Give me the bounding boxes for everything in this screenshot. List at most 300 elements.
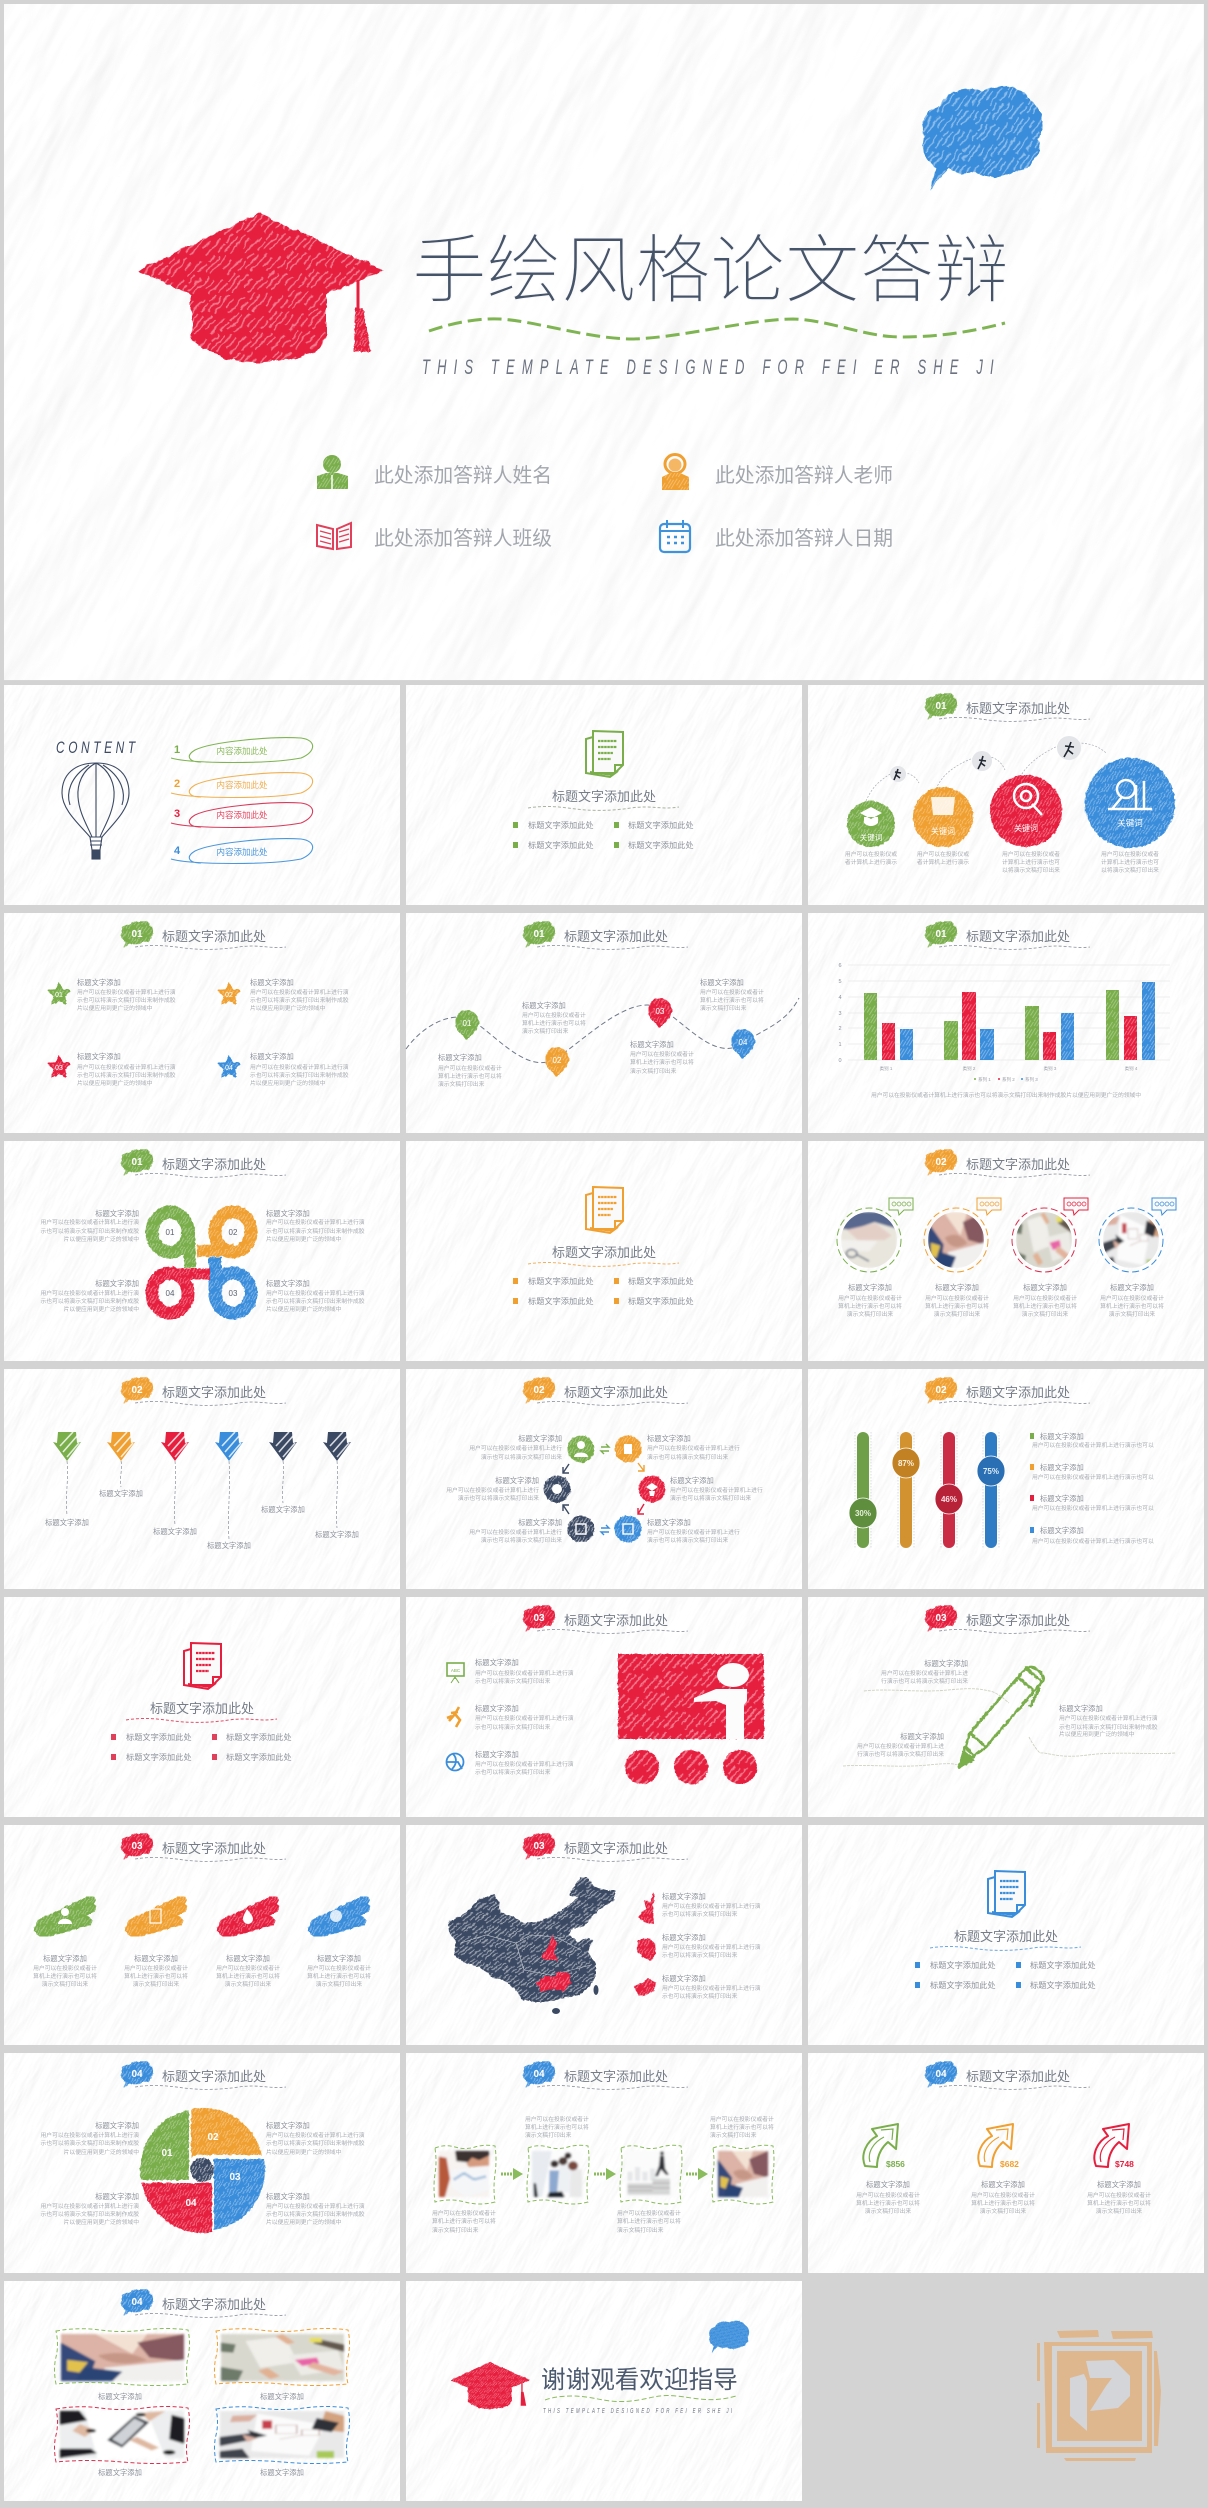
cycle nodes: [544, 1436, 666, 1542]
caption 2: 演示文稿打印出来: [525, 2131, 572, 2139]
text block 1: 行演示也可以将演示文稿打印出来: [881, 1677, 968, 1685]
text: navy left: 标题文字添加: [495, 1476, 539, 1485]
text: item 3: [475, 1750, 574, 1776]
captions: 者计算机上进行演示: [845, 858, 897, 866]
caption 3: 演示文稿打印出来: [1022, 1310, 1068, 1318]
text block 2: 示也可以将演示文稿打印出来制作成胶: [1059, 1723, 1158, 1731]
photo circle 3: [1012, 1198, 1088, 1272]
header: 01: [533, 929, 545, 940]
chart caption: 用户可以在投影仪或者计算机上进行演示也可以将演示文稿打印出来制作成胶片以便应用到更广泛的领域中: [871, 1091, 1141, 1099]
text: navy bottom: [469, 1518, 562, 1544]
circle: blue keyword: 关键词: [1117, 818, 1143, 828]
text: navy bottom: 标题文字添加: [518, 1518, 562, 1527]
legend item green: [1030, 1432, 1154, 1449]
captions: [845, 850, 1159, 874]
header: 标题文字添加此处: [162, 1841, 266, 1856]
header: [925, 2062, 1090, 2089]
header: [523, 1378, 688, 1405]
text: blue: 用户可以在投影仪或者计算机上进行: [647, 1528, 740, 1536]
header: [523, 2062, 688, 2089]
header: 04: [533, 2069, 545, 2080]
header: [925, 694, 1090, 721]
slide: section 01 green: [406, 685, 802, 905]
header: 标题文字添加此处: [564, 1613, 668, 1628]
text: green: 演示也可以将演示文稿打印出来: [481, 1453, 562, 1461]
province icon 2: [637, 1938, 656, 1961]
item 03: [48, 1052, 176, 1087]
pin 02: 02: [553, 1056, 562, 1065]
caption 3: 算机上进行演示也可以将: [617, 2217, 681, 2225]
arrow: green $856: $856: [886, 2159, 905, 2169]
connector arcs and runner badges: [866, 736, 1106, 801]
captions: 者计算机上进行演示: [917, 858, 969, 866]
item 02: 标题文字添加: [250, 978, 294, 987]
bar chart: 类别 2: [963, 1065, 976, 1072]
slide: presenter: [406, 1597, 802, 1817]
bullet list: 标题文字添加此处: [126, 1752, 192, 1762]
header: [925, 1150, 1090, 1177]
text block A: 标题文字添加: [438, 1053, 482, 1062]
text: top left: 示也可以将演示文稿打印出来制作成胶: [40, 1227, 139, 1235]
slide: photo process: [406, 2053, 802, 2273]
text block B: [522, 1001, 586, 1035]
caption 1: [33, 1954, 97, 1988]
legend item orange: 用户可以在投影仪或者计算机上进行演示也可以: [1032, 1473, 1154, 1481]
icon: documents: [586, 731, 623, 777]
text: bottom right: 用户可以在投影仪或者计算机上进行演: [266, 2202, 365, 2210]
list item 1: 1: [174, 744, 180, 756]
text: blue: 标题文字添加: [647, 1518, 691, 1527]
caption 2: 用户可以在投影仪或者计: [525, 2115, 589, 2123]
header: 标题文字添加此处: [966, 701, 1070, 716]
photo 4: 标题文字添加: [260, 2468, 304, 2477]
photo 1: [54, 2328, 190, 2401]
caption 4: 演示文稿打印出来: [1109, 1310, 1155, 1318]
text block 2: 用户可以在投影仪或者计算机上进行演: [1059, 1714, 1158, 1722]
list item 4: 4: [174, 845, 181, 857]
icon: documents: [184, 1643, 221, 1689]
header: 标题文字添加此处: [162, 1385, 266, 1400]
header: 02: [935, 1385, 947, 1396]
list item 2: 内容添加此处: [216, 780, 268, 790]
arrow 4: 标题文字添加: [207, 1541, 251, 1550]
bullet list: [513, 1276, 694, 1306]
text: bottom left: 标题文字添加: [95, 1279, 139, 1288]
header: 03: [533, 1841, 545, 1852]
arrow 2: [99, 1432, 143, 1498]
caption 4: 标题文字添加: [317, 1954, 361, 1963]
text block C: 用户可以在投影仪或者计: [630, 1050, 694, 1058]
icon: hot air balloon: [62, 763, 129, 859]
text: bottom left: 标题文字添加: [95, 2192, 139, 2201]
header: 02: [131, 1385, 143, 1396]
caption 2: 用户可以在投影仪或者计: [971, 2191, 1035, 2199]
slide: price arrows: [808, 2053, 1204, 2273]
caption 2: [124, 1954, 188, 1988]
slide: brush icons: [4, 1825, 400, 2045]
list item 4: 内容添加此处: [216, 847, 268, 857]
section title: 标题文字添加此处: [150, 1701, 254, 1716]
text item 3: 示也可以将演示文稿打印出来: [662, 1992, 738, 2000]
text block B: 标题文字添加: [522, 1001, 566, 1010]
item 01: 标题文字添加: [77, 978, 121, 987]
bullet list: [111, 1732, 292, 1762]
caption 1: 演示文稿打印出来: [847, 1310, 893, 1318]
brush icon: red: [222, 1900, 274, 1933]
header: 01: [935, 701, 947, 712]
caption 3: [617, 2209, 681, 2234]
text: top left: 用户可以在投影仪或者计算机上进行演: [40, 1218, 139, 1226]
captions: 用户可以在投影仪或: [917, 850, 969, 858]
text block D: 标题文字添加: [700, 978, 744, 987]
slider: 30%: 30%: [855, 1509, 871, 1518]
slider: 30%: [849, 1432, 877, 1548]
text block C: 算机上进行演示也可以将: [630, 1058, 694, 1066]
slide: hanging arrows: [4, 1369, 400, 1589]
pinwheel pie chart: 04: [185, 2198, 197, 2209]
header: [925, 922, 1090, 949]
legend item green: 标题文字添加: [1040, 1432, 1084, 1441]
text: navy left: 演示也可以将演示文稿打印出来: [458, 1494, 539, 1502]
text: top left: 标题文字添加: [95, 1209, 139, 1218]
item 03: 片以便应用到更广泛的领域中: [77, 1079, 153, 1087]
text: red: 标题文字添加: [670, 1476, 714, 1485]
icon: blue thought cloud: [922, 86, 1043, 190]
text: bottom right: [266, 1279, 365, 1313]
header: 04: [131, 2069, 143, 2080]
pin 04: 04: [739, 1038, 748, 1047]
caption 2: [525, 2115, 589, 2139]
text block A: 用户可以在投影仪或者计: [438, 1064, 502, 1072]
text: top left: 片以便应用到更广泛的领域中: [64, 1235, 139, 1243]
arrow 4: [207, 1432, 251, 1550]
slide: cover: [4, 4, 1204, 680]
sketch lines: [843, 1689, 1175, 1766]
arrow: orange $682: [978, 2124, 1019, 2169]
text block B: 用户可以在投影仪或者计: [522, 1011, 586, 1019]
header: [121, 2290, 286, 2317]
caption 4: 标题文字添加: [1110, 1283, 1154, 1292]
header: 标题文字添加此处: [966, 1385, 1070, 1400]
header: [121, 2062, 286, 2089]
text: bottom left: 片以便应用到更广泛的领域中: [64, 1305, 139, 1313]
text: bottom right: 示也可以将演示文稿打印出来制作成胶: [266, 1297, 365, 1305]
list item 4: [171, 839, 313, 864]
text: top left: 示也可以将演示文稿打印出来制作成胶: [40, 2139, 139, 2147]
bullet list: 标题文字添加此处: [528, 1276, 594, 1286]
header: [925, 1606, 1090, 1633]
text: bottom left: 用户可以在投影仪或者计算机上进行演: [40, 1289, 139, 1297]
header: 02: [533, 1385, 545, 1396]
header: [121, 1150, 286, 1177]
photo circle 4: [1099, 1198, 1176, 1272]
arrow 3: [153, 1432, 197, 1536]
caption 2: 标题文字添加: [134, 1954, 178, 1963]
text block D: [700, 978, 764, 1012]
bar chart: 3: [838, 1011, 842, 1017]
item 04: 04: [225, 1065, 233, 1072]
circle: red keyword: 关键词: [1014, 823, 1038, 833]
section title: 标题文字添加此处: [552, 1245, 656, 1260]
bullet list: 标题文字添加此处: [226, 1752, 292, 1762]
text item 2: 标题文字添加: [662, 1933, 706, 1942]
chart legend: 系列 1: [978, 1076, 991, 1083]
circle: green keyword: 关键词: [860, 832, 882, 842]
text: blue: 演示也可以将演示文稿打印出来: [647, 1536, 728, 1544]
text: top right: 片以便应用到更广泛的领域中: [266, 1235, 342, 1243]
text: top left: 标题文字添加: [95, 2121, 139, 2130]
header: [121, 1834, 286, 1861]
arrow 1: [501, 2168, 523, 2180]
text item 3: [662, 1974, 761, 2000]
icon: graduation cap: [451, 2362, 530, 2409]
chart legend: 系列 2: [1002, 1076, 1015, 1083]
pin 02: [545, 1047, 569, 1077]
item 01: 01: [55, 992, 63, 999]
caption 3: 标题文字添加: [1023, 1283, 1067, 1292]
header: 01: [131, 1157, 143, 1168]
text: navy bottom: 演示也可以将演示文稿打印出来: [481, 1536, 562, 1544]
header: 标题文字添加此处: [162, 1157, 266, 1172]
legend item red: 标题文字添加: [1040, 1494, 1084, 1503]
arrow 1: [45, 1432, 89, 1527]
info row: date: [660, 520, 893, 552]
text block 1: 用户可以在投影仪或者计算机上进: [881, 1669, 968, 1677]
list item 2: 2: [174, 778, 180, 790]
info row: class: [317, 523, 552, 550]
legend item blue: [1030, 1526, 1154, 1545]
captions: 用户可以在投影仪或者: [1101, 850, 1159, 858]
icon: globe arrow: [446, 1754, 464, 1770]
text block 3: 标题文字添加: [900, 1732, 944, 1741]
brush icon: green: [39, 1900, 91, 1933]
section title: 标题文字添加此处: [954, 1929, 1058, 1944]
text block A: [438, 1053, 502, 1088]
header: [523, 1834, 688, 1861]
text: item 3: 用户可以在投影仪或者计算机上进行演: [475, 1760, 574, 1768]
slider: 46%: 46%: [941, 1495, 957, 1504]
text: orange: 标题文字添加: [647, 1434, 691, 1443]
pinwheel pie chart: 02: [207, 2132, 219, 2143]
circle: blue keyword: [1085, 758, 1175, 848]
caption 2: [971, 2180, 1035, 2215]
slide: section 03 red: [4, 1597, 400, 1817]
caption 1: 标题文字添加: [866, 2180, 910, 2189]
loop numbers: 02: [229, 1228, 238, 1237]
photo 2: 标题文字添加: [260, 2392, 304, 2401]
text: top right: 标题文字添加: [266, 1209, 310, 1218]
text: top left: [40, 1209, 139, 1243]
text item 1: 示也可以将演示文稿打印出来: [662, 1910, 738, 1918]
bar chart: 类别 3: [1044, 1065, 1057, 1072]
caption 2: 标题文字添加: [935, 1283, 979, 1292]
slider: 46%: [935, 1432, 963, 1548]
bullet list: 标题文字添加此处: [1030, 1960, 1096, 1970]
text: top right: 标题文字添加: [266, 2121, 310, 2130]
arrow 6: [315, 1432, 359, 1539]
bar chart: 类别 1: [880, 1065, 893, 1072]
subtitle: THIS TEMPLATE DESIGNED FOR FEI ER SHE JI: [422, 355, 994, 379]
bullet list: [513, 820, 694, 850]
bar chart: 6: [838, 963, 842, 969]
header: 标题文字添加此处: [966, 1157, 1070, 1172]
info row: teacher: 此处添加答辩人老师: [715, 465, 893, 487]
info row: teacher: [662, 454, 893, 490]
photo frame 3: [620, 2145, 682, 2204]
caption 1: 算机上进行演示也可以将: [432, 2217, 496, 2225]
text: green: 用户可以在投影仪或者计算机上进行: [469, 1444, 562, 1452]
header: 03: [533, 1613, 545, 1624]
text block 3: [857, 1732, 944, 1758]
arrow 5: [261, 1432, 305, 1514]
text: orange: [647, 1434, 740, 1461]
caption 2: 标题文字添加: [981, 2180, 1025, 2189]
legend item red: [1030, 1494, 1154, 1512]
caption 1: 演示文稿打印出来: [432, 2226, 479, 2234]
text block A: 演示文稿打印出来: [438, 1080, 485, 1088]
text: item 2: 示也可以将演示文稿打印出来: [475, 1723, 551, 1731]
header: 标题文字添加此处: [162, 2297, 266, 2312]
pin 04: [731, 1029, 755, 1059]
legend item blue: 用户可以在投影仪或者计算机上进行演示也可以: [1032, 1537, 1154, 1545]
caption 3: 算机上进行演示也可以将: [1087, 2199, 1151, 2207]
caption 1: 算机上进行演示也可以将: [856, 2199, 920, 2207]
caption 1: 用户可以在投影仪或者计: [33, 1964, 97, 1972]
text: red: 用户可以在投影仪或者计算机上进行: [670, 1486, 763, 1494]
caption 2: 用户可以在投影仪或者计: [925, 1294, 989, 1302]
item 03: 用户可以在投影仪或者计算机上进行演: [77, 1063, 176, 1071]
item 01: 示也可以将演示文稿打印出来制作成胶: [77, 996, 176, 1004]
list item 1: 内容添加此处: [216, 746, 268, 756]
header: 01: [935, 929, 947, 940]
text: green: 标题文字添加: [518, 1434, 562, 1443]
caption 3: 演示文稿打印出来: [617, 2226, 664, 2234]
caption 1: 演示文稿打印出来: [42, 1980, 88, 1988]
caption 3: 用户可以在投影仪或者计: [216, 1964, 280, 1972]
header: 01: [131, 929, 143, 940]
captions: 用户可以在投影仪或者: [1002, 850, 1060, 858]
bullet list: 标题文字添加此处: [628, 820, 694, 830]
caption 3: 标题文字添加: [1097, 2180, 1141, 2189]
text: green: [469, 1434, 562, 1461]
slide: bar chart: [808, 913, 1204, 1133]
bullet list: 标题文字添加此处: [528, 840, 594, 850]
text: item 1: 用户可以在投影仪或者计算机上进行演: [475, 1669, 574, 1677]
text: top right: 用户可以在投影仪或者计算机上进行演: [266, 1218, 365, 1226]
text: top left: [40, 2121, 139, 2156]
list item 1: [171, 738, 313, 762]
caption 4: 算机上进行演示也可以将: [307, 1972, 371, 1980]
caption 4: 算机上进行演示也可以将: [710, 2123, 774, 2131]
caption 1: 标题文字添加: [848, 1283, 892, 1292]
legend item green: 用户可以在投影仪或者计算机上进行演示也可以: [1032, 1441, 1154, 1449]
icon: green pen: [959, 1667, 1044, 1767]
caption 3: [1087, 2180, 1151, 2215]
slide: photo grid: [4, 2281, 400, 2501]
item 01: [48, 978, 176, 1012]
photo circle 2: [924, 1198, 1001, 1272]
green dashed wave: [429, 319, 1005, 339]
pin 01: 01: [463, 1019, 472, 1028]
slide: pinwheel pie: [4, 2053, 400, 2273]
circle: orange keyword: 关键词: [931, 826, 955, 836]
caption 3: 用户可以在投影仪或者计: [1013, 1294, 1077, 1302]
bullet list: 标题文字添加此处: [1030, 1980, 1096, 1990]
text: top right: 示也可以将演示文稿打印出来制作成胶: [266, 1227, 365, 1235]
text: red: [670, 1476, 763, 1502]
photo circle 1: [837, 1198, 913, 1272]
photo 3: 标题文字添加: [98, 2468, 142, 2477]
caption 4: [1100, 1283, 1164, 1318]
captions: 以将演示文稿打印出来: [1101, 866, 1159, 874]
caption 3: [1013, 1283, 1077, 1318]
text: top left: 片以便应用到更广泛的领域中: [64, 2148, 139, 2156]
slider: 87%: 87%: [898, 1459, 914, 1468]
header: 标题文字添加此处: [162, 929, 266, 944]
caption 2: 算机上进行演示也可以将: [124, 1972, 188, 1980]
text item 3: 用户可以在投影仪或者计算机上进行演: [662, 1984, 761, 1992]
caption 1: 用户可以在投影仪或者计: [432, 2209, 496, 2217]
chart legend: 系列 3: [1025, 1076, 1038, 1083]
caption 2: 算机上进行演示也可以将: [525, 2123, 589, 2131]
caption 2: 算机上进行演示也可以将: [971, 2199, 1035, 2207]
info row: name: 此处添加答辩人姓名: [374, 465, 552, 487]
arrow 5: 标题文字添加: [261, 1505, 305, 1514]
text: blue: [647, 1518, 740, 1544]
list item 2: [171, 773, 313, 798]
bar chart: 4: [838, 995, 842, 1001]
photo 3: [54, 2406, 190, 2477]
text: navy left: [446, 1476, 539, 1502]
caption 2: 演示文稿打印出来: [133, 1980, 179, 1988]
list item 3: [171, 803, 313, 828]
text: item 1: 示也可以将演示文稿打印出来: [475, 1677, 551, 1685]
header: 标题文字添加此处: [564, 929, 668, 944]
text block C: [630, 1040, 694, 1075]
item 04: 用户可以在投影仪或者计算机上进行演: [250, 1063, 349, 1071]
arrow 6: 标题文字添加: [315, 1530, 359, 1539]
text block 2: [1059, 1704, 1158, 1738]
text: top right: 示也可以将演示文稿打印出来制作成胶: [266, 2139, 365, 2147]
caption 4: 演示文稿打印出来: [710, 2131, 757, 2139]
slide: pen: [808, 1597, 1204, 1817]
text block D: 用户可以在投影仪或者计: [700, 988, 764, 996]
text block D: 演示文稿打印出来: [700, 1004, 747, 1012]
text: item 1: [475, 1658, 574, 1685]
circle: orange keyword: [913, 787, 973, 847]
caption 1: [432, 2209, 496, 2234]
legend item blue: 标题文字添加: [1040, 1526, 1084, 1535]
caption 1: 算机上进行演示也可以将: [33, 1972, 97, 1980]
heading: CONTENT: CONTENT: [56, 739, 136, 758]
caption 1: [856, 2180, 920, 2215]
icon: blue cloud: [709, 2321, 749, 2353]
text: item 2: [475, 1704, 574, 1731]
caption 4: 用户可以在投影仪或者计: [1100, 1294, 1164, 1302]
photo 4: [214, 2406, 350, 2477]
text: bottom right: 示也可以将演示文稿打印出来制作成胶: [266, 2210, 365, 2218]
bullet list: 标题文字添加此处: [930, 1960, 996, 1970]
caption 4: 算机上进行演示也可以将: [1100, 1302, 1164, 1310]
caption 3: 算机上进行演示也可以将: [1013, 1302, 1077, 1310]
header: 04: [935, 2069, 947, 2080]
item 04: 示也可以将演示文稿打印出来制作成胶: [250, 1071, 349, 1079]
text: orange: 用户可以在投影仪或者计算机上进行: [647, 1444, 740, 1452]
slide: growing circles: [808, 685, 1204, 905]
caption 1: 演示文稿打印出来: [865, 2207, 911, 2215]
text block 2: 标题文字添加: [1059, 1704, 1103, 1713]
bar chart: 类别 4: [1125, 1065, 1138, 1072]
